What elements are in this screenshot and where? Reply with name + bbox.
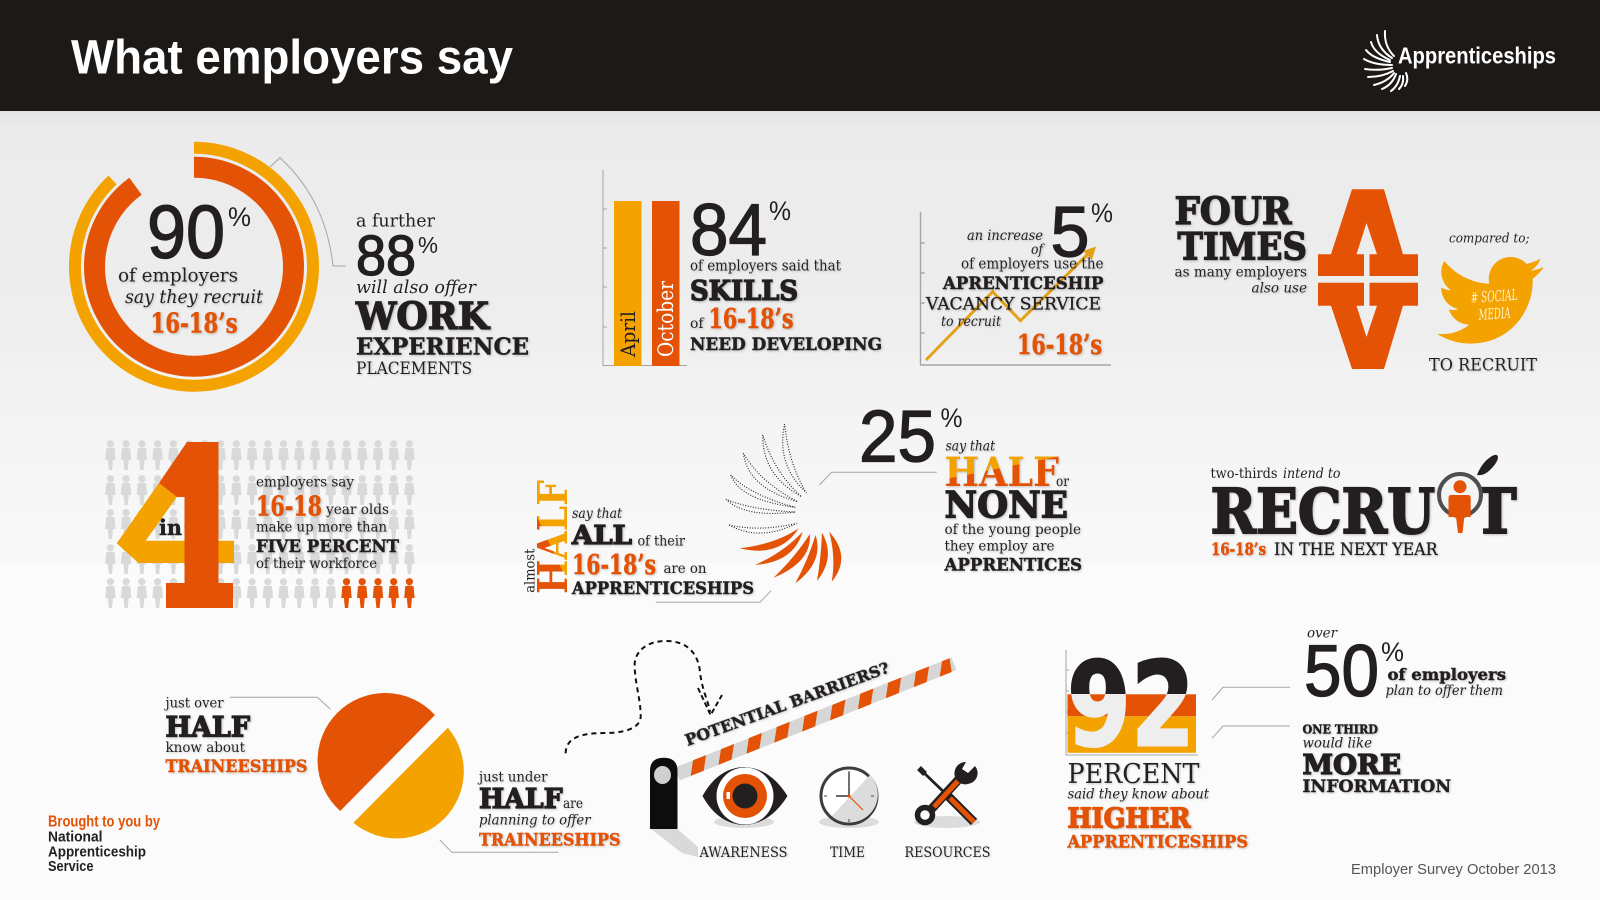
caption: FIVE PERCENT — [256, 537, 399, 557]
pictogram: people grid — [105, 440, 415, 608]
panel: further 88 percent work experience: EXPERIENCE — [356, 334, 529, 360]
panel: one third more information: ONE THIRD — [1302, 722, 1378, 736]
panel: 25 percent half or none — [819, 396, 1082, 576]
icon labels: RESOURCES — [904, 845, 990, 861]
title: What employers say — [71, 32, 513, 84]
panel: further 88 percent work experience: % — [418, 232, 438, 258]
panel: 84 percent skills: of employers said that — [690, 256, 841, 274]
icon labels — [699, 845, 990, 861]
panel: two-thirds intend to recruit: IN THE NEXT YEAR — [1274, 540, 1439, 560]
icon: bird with social media tag: MEDIA — [1477, 304, 1511, 324]
panel: over 50 percent: % — [1381, 637, 1404, 667]
panel: further 88 percent work experience: 88 — [356, 224, 416, 288]
ring caption: say they recruit — [125, 286, 263, 308]
logo: Apprenticeships — [1364, 31, 1556, 91]
panel: further 88 percent work experience: PLACEMENTS — [356, 359, 472, 378]
panel: 92 percent higher apprenticeships: said they know about — [1068, 786, 1209, 802]
panel: almost half all apprenticeships — [522, 480, 771, 602]
icon: tools — [914, 762, 980, 828]
bar chart: April vs October: April — [616, 311, 640, 358]
panel: over 50 percent: of employers — [1388, 665, 1506, 684]
25 percent: 25 — [859, 396, 936, 478]
panel: four times social media: TO RECRUIT — [1429, 356, 1538, 376]
panel: potential barriers — [566, 641, 990, 861]
panel: 92 percent higher apprenticeships: PERCENT — [1068, 759, 1200, 790]
panel: over 50 percent: 50 — [1304, 631, 1379, 712]
panel: 84 percent skills: of — [690, 316, 705, 332]
panel: 5 percent vacancy service: VACANCY SERVICE — [925, 294, 1101, 314]
84 percent: 84 — [690, 190, 767, 271]
icon labels: TIME — [830, 845, 865, 861]
icon: magnifier with person as letter I — [1439, 455, 1498, 533]
panel: 25 percent half or none: % — [940, 403, 962, 433]
icon: bird with social media tag: # SOCIAL — [1470, 286, 1518, 307]
panel: further 88 percent work experience: WORK — [355, 294, 491, 338]
panel: 25 percent half or none: say that — [946, 438, 995, 454]
bar chart: April vs October — [603, 170, 687, 366]
panel: 5 percent vacancy service: of — [1031, 242, 1045, 258]
text: just over half: just over — [164, 696, 224, 712]
credit: brought to you by: National — [48, 828, 102, 846]
panel: four times social media: also use — [1252, 280, 1307, 296]
icon: eye — [702, 767, 788, 828]
header band — [0, 0, 1600, 111]
panel: 92 percent higher apprenticeships: APPRENTICESHIPS — [1067, 832, 1248, 852]
ring caption — [118, 264, 263, 340]
panel: almost half all apprenticeships: HALF — [529, 480, 577, 594]
text: just over half: TRAINEESHIPS — [166, 757, 308, 777]
panel: four times social media: TIMES — [1178, 224, 1307, 268]
panel: almost half all apprenticeships: APPRENTICESHIPS — [571, 579, 754, 598]
big numeral 1 in 4: in — [159, 515, 182, 540]
icon: bird with social media tag — [1437, 257, 1544, 344]
credit: brought to you by: Service — [48, 858, 94, 875]
big number 90 percent: 90 — [147, 190, 225, 274]
panel: four times social media: FOUR — [1174, 189, 1292, 233]
credit: brought to you by — [48, 814, 160, 875]
panel: two-thirds intend to recruit: intend to — [1283, 466, 1340, 482]
panel: further 88 percent work experience: a further — [356, 210, 435, 232]
bar chart: April vs October: October — [654, 280, 678, 357]
icon: clock — [819, 768, 879, 828]
big numeral 1 in 4 — [117, 442, 234, 608]
panel: 5 percent vacancy service: % — [1091, 198, 1113, 228]
panel: 92 percent higher apprenticeships — [1066, 636, 1290, 852]
panel: 1 in 4 employers — [105, 440, 415, 608]
panel: two-thirds intend to recruit — [1210, 455, 1516, 560]
panel: 5 percent vacancy service — [920, 194, 1113, 365]
panel: two-thirds intend to recruit: RECRU — [1210, 475, 1435, 548]
panel: 90 percent ring: % — [228, 202, 251, 232]
caption: year olds — [325, 502, 389, 518]
panel: 84 percent skills — [603, 170, 882, 366]
panel: over 50 percent — [1304, 626, 1506, 712]
panel: 84 percent skills: SKILLS — [690, 276, 798, 307]
icon: wing of feathers — [726, 424, 841, 583]
icon: up and down arrows — [1318, 189, 1418, 369]
caption — [256, 474, 399, 572]
icon labels: AWARENESS — [699, 845, 788, 861]
text: just under half: HALF — [479, 784, 562, 815]
panel: 84 percent skills: % — [769, 196, 791, 226]
panel: almost half all apprenticeships: say that — [572, 506, 622, 522]
text: just over half: HALF — [166, 710, 250, 744]
panel: four times social media: compared to; — [1449, 232, 1530, 246]
panel: one third more information — [1302, 722, 1451, 797]
credit: brought to you by: Brought to you by — [48, 814, 160, 830]
text: just over half — [164, 696, 308, 777]
panel: almost half all apprenticeships: are on — [664, 561, 706, 577]
panel: almost half all apprenticeships: 16-18’s — [572, 550, 656, 581]
dashed arrow — [566, 641, 722, 753]
panel: 25 percent half or none: or — [1056, 474, 1069, 490]
panel: one third more information: INFORMATION — [1302, 777, 1451, 797]
panel: two-thirds intend to recruit: 16-18’s — [1211, 540, 1266, 560]
source note: Employer Survey October 2013 — [1351, 861, 1556, 878]
panel: 84 percent skills: NEED DEVELOPING — [690, 335, 882, 355]
panel: 5 percent vacancy service: of employers use the — [961, 254, 1104, 272]
panel: 25 percent half or none: NONE — [944, 484, 1068, 526]
icon: magnifier with person as letter I: I — [1456, 505, 1465, 512]
heading: potential barriers: POTENTIAL BARRIERS? — [682, 658, 892, 750]
panel: four times social media — [1174, 189, 1544, 376]
text: just under half — [477, 770, 620, 850]
panel: over 50 percent: over — [1307, 626, 1338, 642]
ring caption: of employers — [118, 264, 238, 286]
panel: almost half all apprenticeships: of their — [638, 534, 685, 550]
panel: two-thirds intend to recruit: two-thirds — [1210, 466, 1278, 482]
chart: 92 in colour bands: 92 — [1067, 636, 1195, 774]
text: just under half: just under — [477, 770, 548, 786]
panel: 84 percent skills: 16-18’s — [708, 304, 794, 335]
split circle chart — [318, 693, 464, 838]
panel: 5 percent vacancy service: 16-18’s — [1017, 330, 1102, 361]
panel: one third more information: MORE — [1302, 750, 1401, 781]
credit: brought to you by: Apprenticeship — [48, 844, 146, 860]
panel: 25 percent half or none: of the young people — [944, 522, 1081, 538]
ring caption: 16-18’s — [150, 308, 238, 340]
panel: almost half all apprenticeships: almost — [522, 548, 538, 593]
panel: 92 percent higher apprenticeships: HIGHER — [1068, 804, 1191, 834]
panel: almost half all apprenticeships: ALL — [571, 521, 632, 551]
text: just under half: TRAINEESHIPS — [479, 830, 620, 850]
caption: of their workforce — [256, 556, 377, 572]
panel: two-thirds intend to recruit: T — [1474, 475, 1516, 548]
panel: 5 percent vacancy service: to recruit — [941, 314, 1001, 330]
panel: over 50 percent: plan to offer them — [1386, 683, 1503, 699]
text: just under half: planning to offer — [479, 812, 592, 828]
panel: 5 percent vacancy service: an increase — [967, 228, 1043, 244]
caption: employers say — [256, 474, 354, 490]
panel: 5 percent vacancy service: APRENTICESHIP — [942, 274, 1104, 294]
panel: further 88 percent work experience — [355, 210, 529, 378]
panel: 25 percent half or none: HALF — [944, 449, 1059, 496]
panel: traineeships — [164, 693, 621, 852]
panel: 25 percent half or none: they employ are — [944, 538, 1054, 554]
ring chart: 88 percent and 90 percent — [75, 148, 313, 386]
line chart with rising arrow — [920, 212, 1111, 365]
5 percent: 5 — [1050, 194, 1090, 272]
panel: 90 percent ring — [75, 148, 346, 386]
barrier arm — [650, 657, 956, 857]
caption: 16-18 — [256, 492, 322, 522]
panel: further 88 percent work experience: will also offer — [356, 277, 477, 298]
text: just over half: know about — [166, 740, 245, 756]
logo: Apprenticeships: Apprenticeships — [1398, 42, 1556, 68]
text: just under half: are — [563, 796, 583, 812]
panel: four times social media: as many employers — [1174, 264, 1307, 280]
panel: 25 percent half or none: APPRENTICES — [944, 556, 1082, 576]
panel: one third more information: would like — [1302, 736, 1372, 752]
caption: make up more than — [256, 520, 387, 536]
